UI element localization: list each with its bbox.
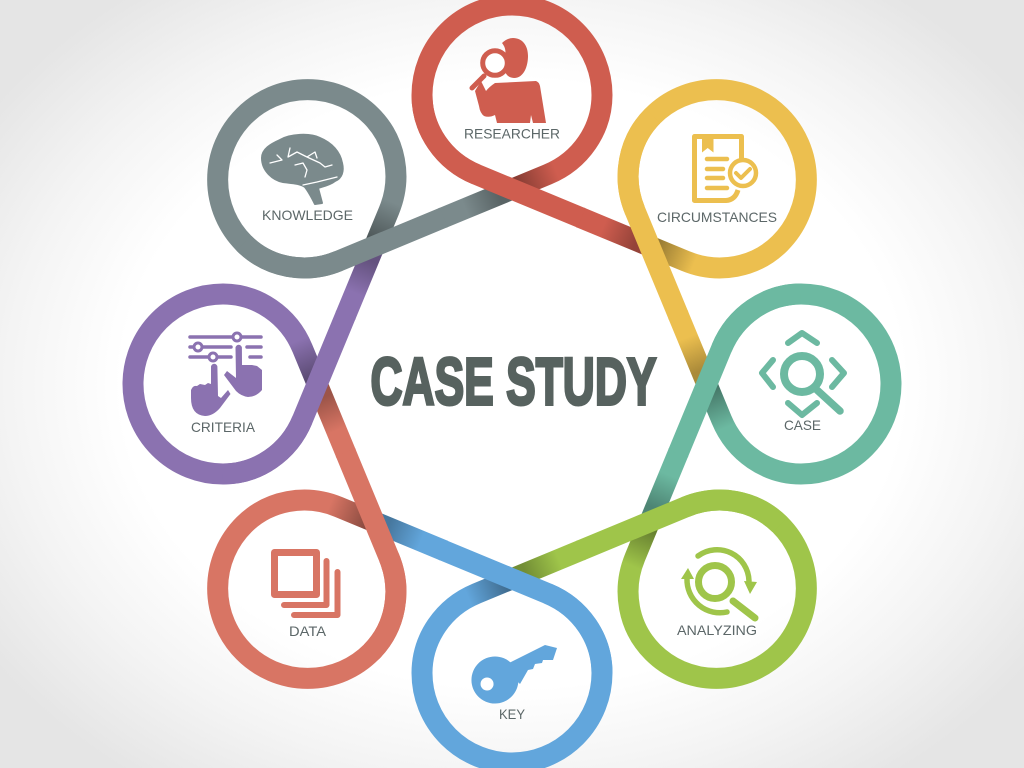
label: data: DATA <box>289 623 327 639</box>
ribbon tails crossing over at the octagon corners <box>223 95 801 673</box>
icon: key <box>471 645 557 704</box>
label: analyzing: ANALYZING <box>677 622 757 638</box>
icon: criteria sliders and hands <box>190 333 262 416</box>
ring: researcher <box>422 5 602 189</box>
icon: case magnifier <box>762 333 844 415</box>
ring: key <box>422 579 602 763</box>
ring: circumstances <box>586 52 844 310</box>
label: key: KEY <box>499 706 526 722</box>
icon: document with check <box>694 135 756 200</box>
title: CASE STUDY <box>370 344 656 420</box>
label: circumstances: CIRCUMSTANCES <box>657 209 777 225</box>
ring: data <box>180 458 438 716</box>
ring: criteria <box>133 294 317 474</box>
label: knowledge: KNOWLEDGE <box>262 207 353 223</box>
ring: knowledge <box>180 52 438 310</box>
label: researcher: RESEARCHER <box>464 126 560 142</box>
ring: case <box>707 294 891 474</box>
label: case: CASE <box>784 417 821 433</box>
icon: brain <box>262 135 343 204</box>
ribbon ends tucked under the next ribbon <box>297 169 727 599</box>
icon: analyzing magnifier <box>681 550 757 618</box>
label: criteria: CRITERIA <box>191 419 256 435</box>
icon: data stack <box>274 552 338 615</box>
ring: analyzing <box>586 458 844 716</box>
icon: researcher <box>472 38 546 123</box>
